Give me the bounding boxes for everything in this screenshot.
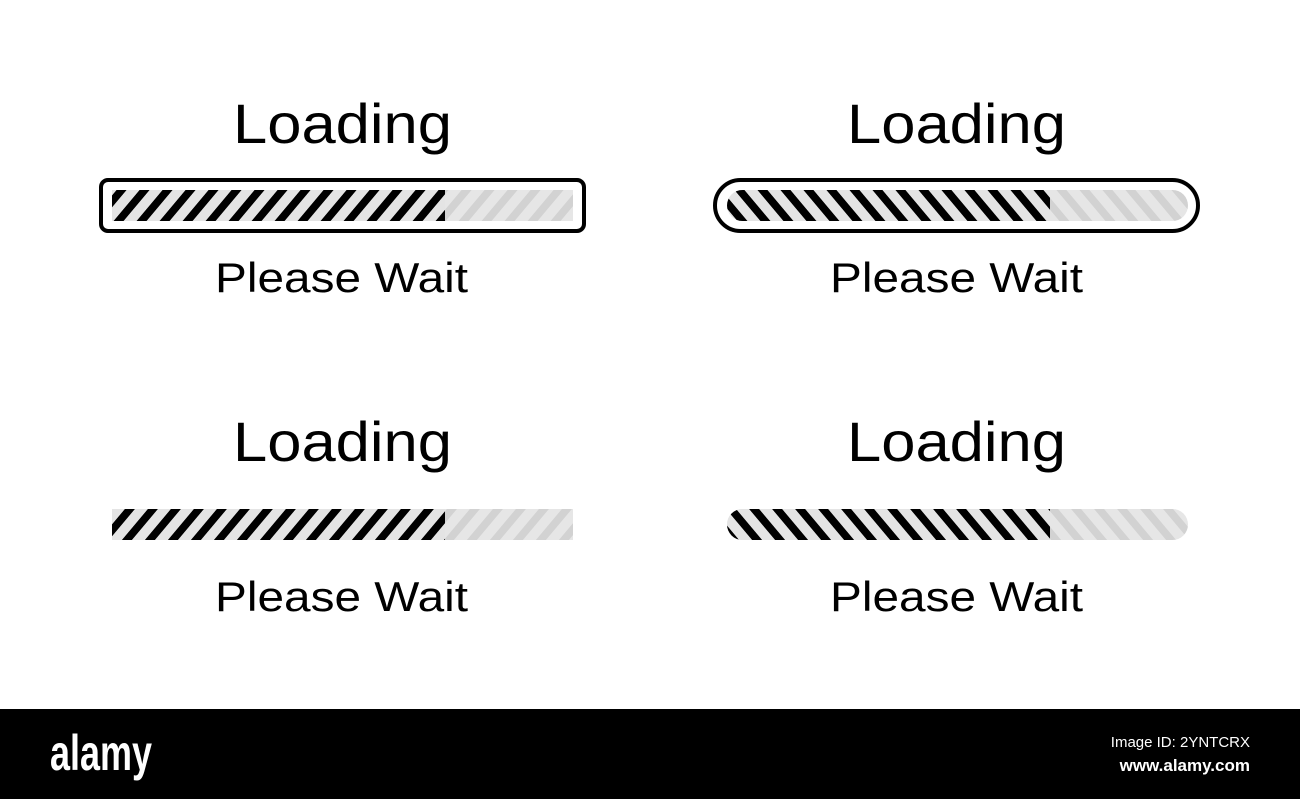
label: please wait 3: Please Wait [215, 573, 468, 620]
heading: loading 3: Loading [233, 410, 452, 473]
heading: loading 2: Loading [847, 92, 1066, 155]
website: www.alamy.com [1119, 756, 1250, 775]
label: please wait 2: Please Wait [830, 254, 1083, 301]
panel: loader 4 [727, 410, 1188, 620]
label: please wait 4: Please Wait [830, 573, 1083, 620]
panel: loader 1 [101, 92, 584, 301]
footer bar [0, 709, 1300, 799]
progress bar 2 [715, 180, 1198, 231]
image id: Image ID: 2YNTCRX [1111, 734, 1250, 751]
progress bar 4 [727, 509, 1188, 540]
panel: loader 3 [112, 410, 573, 620]
label: please wait 1: Please Wait [215, 254, 468, 301]
progress bar 3 [112, 509, 573, 540]
heading: loading 1: Loading [233, 92, 452, 155]
logo: alamy: alamy [50, 725, 152, 781]
panel: loader 2 [715, 92, 1198, 301]
progress bar 1 [101, 180, 584, 231]
heading: loading 4: Loading [847, 410, 1066, 473]
